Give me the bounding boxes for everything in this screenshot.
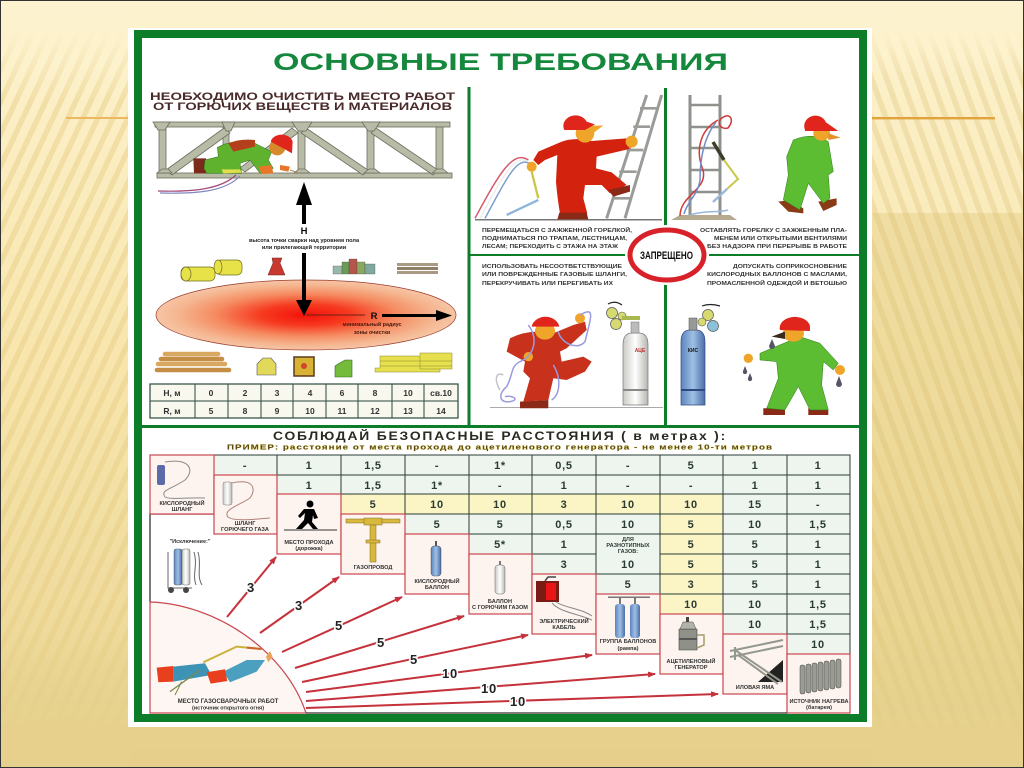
row 4: 5 xyxy=(434,519,440,531)
arrow 5: 5 m: 5 xyxy=(410,652,418,667)
heading: clear flammables: ОТ ГОРЮЧИХ ВЕЩЕСТВ И МАТЕРИАЛОВ xyxy=(153,101,452,113)
table: H and R values: 3 xyxy=(275,388,280,398)
row 1: - xyxy=(626,460,630,472)
arrow: radius R xyxy=(306,310,452,321)
tangled hoses xyxy=(496,312,591,402)
arrow 7: 10 m xyxy=(306,674,655,701)
row 2: 1,5 xyxy=(364,480,382,492)
decorative orange rule xyxy=(66,117,995,119)
panel: clear the work area xyxy=(150,91,458,418)
arrow 6: 10 m xyxy=(306,655,592,692)
row 2: 1 xyxy=(752,480,758,492)
hoses hanging on ladder xyxy=(680,116,731,216)
hoses xyxy=(158,175,240,193)
row 4: 1,5 xyxy=(809,519,827,531)
arrow 2: 3 m xyxy=(260,577,339,633)
table: H and R values xyxy=(150,384,458,418)
row 7 xyxy=(596,574,850,594)
row 6: 5 xyxy=(688,559,694,571)
row 3: 15 xyxy=(748,499,762,511)
row 4: 5 xyxy=(497,519,503,531)
heading: clear flammables xyxy=(150,91,455,113)
worker in red tangled in hoses xyxy=(507,313,592,408)
box: cylinder group: (рампа) xyxy=(618,646,639,652)
table: H and R values: 5 xyxy=(209,406,214,416)
box: fuel gas cylinder xyxy=(469,554,532,614)
arrow: height H down xyxy=(296,253,312,316)
icon: stacked cans xyxy=(333,259,375,274)
row 4: 5 xyxy=(688,519,694,531)
caption: welding height: или прилегающей территории xyxy=(262,244,347,251)
row 5 and merged mixed-gas cell: 5 xyxy=(688,539,694,551)
poster xyxy=(128,28,872,727)
table: H and R values: 10 xyxy=(305,406,315,416)
row 4 xyxy=(405,514,850,534)
row 2: - xyxy=(626,480,630,492)
box: oxygen hose: КИСЛОРОДНЫЙ xyxy=(159,499,205,507)
ladder xyxy=(607,95,662,218)
row 5 and merged mixed-gas cell: 5* xyxy=(494,539,506,551)
box: fuel gas hose: ГОРЮЧЕГО ГАЗА xyxy=(221,527,269,533)
row 3 xyxy=(341,494,850,514)
row 1: 0,5 xyxy=(555,460,573,472)
box: gas pipeline: ГАЗОПРОВОД xyxy=(354,565,392,571)
box: oxygen cylinder: БАЛЛОН xyxy=(425,585,449,591)
arrow 5: 5 m xyxy=(302,635,528,682)
box: cylinder group xyxy=(596,594,660,654)
box: fuel gas hose xyxy=(214,475,277,534)
prohibition sign xyxy=(625,225,709,285)
row 7: 3 xyxy=(688,579,694,591)
worker in green with oily hands xyxy=(744,317,845,415)
box: walkway: (дорожка) xyxy=(295,546,323,552)
arrow 7: 10 m: 10 xyxy=(481,681,497,696)
table: H and R values: 10 xyxy=(403,388,413,398)
white fuel gas cylinder with gauges xyxy=(606,302,648,405)
caption: oil contact: КИСЛОРОДНЫХ БАЛЛОНОВ С МАСЛАМИ, xyxy=(707,272,847,278)
caption: moving with torch: ПОДНИМАТЬСЯ ПО ТРАПАМ, ЛЕСТНИЦАМ, xyxy=(482,236,627,242)
box: heat source: (батарея) xyxy=(806,704,832,711)
row 8: 10 xyxy=(748,599,762,611)
caption: minimum radius xyxy=(342,321,402,336)
panel: damaged gas hoses xyxy=(482,264,663,408)
row 5 and merged mixed-gas cell: 1 xyxy=(561,539,567,551)
title: ОСНОВНЫЕ ТРЕБОВАНИЯ xyxy=(273,49,728,76)
crawling welder xyxy=(193,135,300,174)
caption: oil contact: ПРОМАСЛЕННОЙ ОДЕЖДОЙ И ВЕТОШЬЮ xyxy=(707,279,847,287)
row 5 and merged mixed-gas cell: ДЛЯ xyxy=(622,537,634,543)
caption: moving with torch: ПЕРЕМЕЩАТЬСЯ С ЗАЖЖЕННОЙ ГОРЕЛКОЙ, xyxy=(482,226,632,234)
distance arrows xyxy=(227,557,718,709)
caption: damaged hoses: ИЛИ ПОВРЕЖДЕННЫЕ ГАЗОВЫЕ ШЛАНГИ, xyxy=(482,272,627,278)
arrow 2: 3 m: 3 xyxy=(295,598,303,613)
panel: leaving a lit torch xyxy=(671,95,847,250)
row 6 xyxy=(532,554,850,574)
box: oxygen cylinder: КИСЛОРОДНЫЙ xyxy=(414,577,460,585)
arrow 1: 3 m: 3 xyxy=(247,580,255,595)
caption: damaged hoses: ПЕРЕКРУЧИВАТЬ ИЛИ ПЕРЕГИБАТЬ ИХ xyxy=(482,281,613,287)
row 8 xyxy=(660,594,850,614)
box: oxygen hose xyxy=(150,455,214,514)
icon: yellow rolls xyxy=(181,260,242,281)
label: H: Н xyxy=(301,226,308,237)
row 2: - xyxy=(689,480,693,492)
box: acetylene generator: ГЕНЕРАТОР xyxy=(674,665,708,671)
row 9: 10 xyxy=(748,619,762,631)
table: H and R values: 13 xyxy=(403,406,413,416)
arrow 8: 10 m: 10 xyxy=(510,694,526,709)
arrow 4: 5 m xyxy=(295,616,464,668)
box: electric cable: ЭЛЕКТРИЧЕСКИЙ xyxy=(539,617,589,625)
box: electric cable xyxy=(532,574,596,634)
row 6: 5 xyxy=(752,559,758,571)
label: R: R xyxy=(371,311,378,322)
table: H and R values: 6 xyxy=(340,388,345,398)
caption: minimum radius: зоны очистки xyxy=(354,330,390,336)
caption: moving with torch xyxy=(482,226,632,250)
row 2: - xyxy=(498,480,502,492)
worker in green from behind xyxy=(778,116,841,213)
ground line xyxy=(475,219,662,220)
caption: leaving torch: МЕНЕМ ИЛИ ОТКРЫТЫМИ ВЕНТИЛЯМИ xyxy=(714,236,847,242)
row 1: 5 xyxy=(688,460,694,472)
caption: welding height: высота точки сварки над уровнем пола xyxy=(249,238,360,244)
caption: leaving torch: БЕЗ НАДЗОРА ПРИ ПЕРЕРЫВЕ В РАБОТЕ xyxy=(707,244,847,250)
white fuel gas cylinder with gauges: АЦЕ xyxy=(635,348,646,354)
table: H and R values: 11 xyxy=(338,406,347,416)
row 5 and merged mixed-gas cell: 10 xyxy=(621,559,635,571)
row 10 xyxy=(787,634,850,654)
row 1: - xyxy=(243,460,247,472)
row 1: 1,5 xyxy=(364,460,382,472)
arrow: height H up xyxy=(296,182,312,224)
row 6: 3 xyxy=(561,559,567,571)
row 3: 10 xyxy=(621,499,635,511)
icon: green canister xyxy=(335,360,352,377)
heading: clear flammables: НЕОБХОДИМО ОЧИСТИТЬ МЕСТО РАБОТ xyxy=(150,91,455,103)
icon: boards xyxy=(397,263,438,274)
row 7: 5 xyxy=(752,579,758,591)
box: gas pipeline xyxy=(341,514,405,574)
row 10: 10 xyxy=(811,639,825,651)
box: sludge pit xyxy=(723,634,787,694)
subheading: example: ПРИМЕР: расстояние от места прохода до ацетиленового генератора - не менее 10-ти метров xyxy=(227,442,773,452)
row 8: 1,5 xyxy=(809,599,827,611)
table: H and R values: 9 xyxy=(275,406,280,416)
row 1: 1 xyxy=(306,460,312,472)
row 5 and merged mixed-gas cell xyxy=(469,534,850,574)
row 1: 1 xyxy=(752,460,758,472)
row 1 xyxy=(214,455,850,475)
row 2: 1 xyxy=(561,480,567,492)
panel: moving with a lit torch xyxy=(475,95,662,250)
icon: logs xyxy=(157,354,229,370)
box: heat source: ИСТОЧНИК НАГРЕВА xyxy=(789,699,849,705)
box: fuel gas cylinder: С ГОРЮЧИМ ГАЗОМ xyxy=(472,605,528,611)
row 9: 1,5 xyxy=(809,619,827,631)
row 3: 5 xyxy=(370,499,376,511)
row 3: 10 xyxy=(493,499,507,511)
caption: welding area: (источник открытого огня) xyxy=(192,706,264,712)
row 7: 5 xyxy=(625,579,631,591)
caption: leaving torch xyxy=(700,228,847,250)
box: fuel gas cylinder: БАЛЛОН xyxy=(488,599,512,605)
icon: red canister xyxy=(268,258,285,275)
box: oxygen hose: ШЛАНГ xyxy=(172,507,193,513)
table: H and R values: 14 xyxy=(436,406,446,416)
steel truss xyxy=(153,122,452,178)
poster sheet and green frame xyxy=(128,28,872,727)
row 2 xyxy=(277,475,850,494)
row 5 and merged mixed-gas cell: 1 xyxy=(815,539,821,551)
icon: gloved hands with torch xyxy=(157,647,273,695)
caption: minimum radius: минимальный радиус xyxy=(342,321,402,328)
caption: oil contact: ДОПУСКАТЬ СОПРИКОСНОВЕНИЕ xyxy=(733,264,847,270)
heading: safe distances: СОБЛЮДАЙ БЕЗОПАСНЫЕ РАССТОЯНИЯ ( в метрах ): xyxy=(273,430,727,443)
box: walkway xyxy=(277,494,341,554)
panel: safe distances xyxy=(150,430,850,713)
oil drops xyxy=(743,339,842,387)
table: H and R values: 0 xyxy=(209,388,214,398)
box: fuel gas hose: ШЛАНГ xyxy=(235,521,256,527)
worker in red climbing xyxy=(527,115,638,219)
row 4: 10 xyxy=(748,519,762,531)
blue oxygen cylinder with gauges xyxy=(681,304,720,405)
table: H and R values: св.10 xyxy=(430,388,452,398)
row 3: 10 xyxy=(684,499,698,511)
row 6: 1 xyxy=(815,559,821,571)
caption: welding height xyxy=(249,238,360,251)
caption: oil contact xyxy=(707,264,847,287)
distance table xyxy=(214,455,850,654)
table: H and R values: 12 xyxy=(370,406,380,416)
arrow 6: 10 m: 10 xyxy=(442,666,458,681)
row 1: - xyxy=(435,460,439,472)
ladder base xyxy=(671,215,737,220)
row 4: 0,5 xyxy=(555,519,573,531)
table: H and R values: 4 xyxy=(308,388,313,398)
row 8: 10 xyxy=(684,599,698,611)
hoses and torch xyxy=(475,158,538,218)
row 5 and merged mixed-gas cell: ГАЗОВ: xyxy=(618,549,638,555)
prohibition sign: ЗАПРЕЩЕНО xyxy=(640,250,693,262)
ground line xyxy=(490,407,663,408)
row 3: - xyxy=(816,499,820,511)
caption: moving with torch: ЛЕСАМ; ПЕРЕХОДИТЬ С ЭТАЖА НА ЭТАЖ xyxy=(482,244,619,250)
row 3: 3 xyxy=(561,499,567,511)
row 2: 1 xyxy=(815,480,821,492)
icon: yellow lumber xyxy=(375,353,452,372)
row 2: 1 xyxy=(306,480,312,492)
arrow 4: 5 m: 5 xyxy=(377,635,385,650)
box: oxygen cylinder xyxy=(405,534,469,594)
arrow 3: 5 m: 5 xyxy=(335,618,343,633)
box: walkway: МЕСТО ПРОХОДА xyxy=(284,540,334,546)
box: electric cable: КАБЕЛЬ xyxy=(552,625,576,631)
table: H and R values: 8 xyxy=(243,406,248,416)
row 7: 1 xyxy=(815,579,821,591)
caption: damaged hoses: ИСПОЛЬЗОВАТЬ НЕСООТВЕТСТВУЮЩИЕ xyxy=(482,264,622,270)
hanging torch xyxy=(713,142,738,202)
row 2: 1* xyxy=(431,480,443,492)
row 1: 1 xyxy=(815,460,821,472)
exclusion area with cart: "Исключение:" xyxy=(170,539,211,545)
table: H and R values: 2 xyxy=(243,388,248,398)
arrow 1: 3 m xyxy=(227,557,276,617)
caption: damaged hoses xyxy=(482,264,627,287)
table: H and R values: Н, м xyxy=(163,388,181,398)
arrow 3: 5 m xyxy=(282,597,402,652)
box: heat source xyxy=(787,654,850,713)
icon: yellow jar xyxy=(257,358,276,375)
icon: barrel xyxy=(294,357,314,376)
caption: welding area xyxy=(178,699,279,712)
blue oxygen cylinder with gauges: КИС xyxy=(688,348,699,354)
row 1: 1* xyxy=(494,460,506,472)
caption: welding area: МЕСТО ГАЗОСВАРОЧНЫХ РАБОТ xyxy=(178,699,279,705)
table: H and R values: 8 xyxy=(373,388,378,398)
row 5 and merged mixed-gas cell: 5 xyxy=(752,539,758,551)
welding area quarter circle xyxy=(150,602,787,713)
row 9 xyxy=(723,614,850,634)
ladder with base xyxy=(690,95,720,215)
box: acetylene generator: АЦЕТИЛЕНОВЫЙ xyxy=(667,657,715,665)
row 5 and merged mixed-gas cell: РАЗНОТИПНЫХ xyxy=(606,543,650,549)
panel: oxygen cylinders and oil xyxy=(681,264,847,415)
row 4: 10 xyxy=(621,519,635,531)
cleared zone ellipse xyxy=(156,280,456,350)
box: sludge pit: ИЛОВАЯ ЯМА xyxy=(736,685,774,691)
table: H and R values: R, м xyxy=(163,406,181,416)
exclusion area with cart xyxy=(150,514,214,602)
arrow 8: 10 m xyxy=(306,694,718,709)
row 3: 10 xyxy=(430,499,444,511)
caption: leaving torch: ОСТАВЛЯТЬ ГОРЕЛКУ С ЗАЖЖЕННЫМ ПЛА- xyxy=(700,228,847,234)
box: acetylene generator xyxy=(660,614,723,674)
box: cylinder group: ГРУППА БАЛЛОНОВ xyxy=(600,639,656,645)
